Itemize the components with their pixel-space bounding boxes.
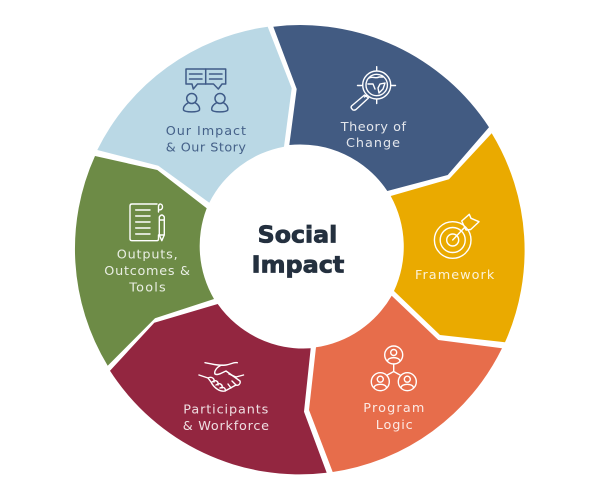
title: Social Impact: Social <box>258 223 337 249</box>
label: Our Impact & Our Story: & Our Story <box>166 141 246 156</box>
label: Theory of Change <box>340 120 406 151</box>
segment shape: dark blue <box>273 25 489 191</box>
label: Program Logic: Program <box>363 401 424 416</box>
label: Our Impact & Our Story <box>166 124 246 156</box>
panel: framework <box>391 133 525 342</box>
label: Outputs, Outcomes & Tools <box>104 247 190 296</box>
title: Social Impact: Impact <box>252 253 344 279</box>
icon: magnifier over globe <box>351 67 396 110</box>
icon: connected people <box>371 346 416 391</box>
label: Outputs, Outcomes & Tools: Outputs, <box>117 247 178 262</box>
label: Participants & Workforce: Participants <box>183 402 269 417</box>
segment shape: maroon <box>110 304 327 474</box>
label: Participants & Workforce <box>183 402 269 434</box>
segment shape: light blue <box>97 27 292 203</box>
icon: handshake <box>199 363 244 391</box>
panel: theory of change <box>273 25 489 191</box>
label: Outputs, Outcomes & Tools: Tools <box>128 281 166 296</box>
label: Program Logic <box>363 401 424 433</box>
panel: program logic <box>309 296 502 472</box>
segment shape: yellow <box>391 133 525 342</box>
icon: speech bubbles and people <box>183 69 228 112</box>
icon: target with arrow <box>434 214 479 258</box>
panel: participants and workforce <box>110 304 327 474</box>
label: Participants & Workforce: & Workforce <box>183 419 269 434</box>
label: Theory of Change: Change <box>346 136 400 151</box>
panel: outputs, outcomes and tools <box>75 156 214 366</box>
panel: our impact and our story <box>97 27 292 203</box>
label: Framework: Framework <box>415 268 495 283</box>
label: Theory of Change: Theory of <box>340 120 406 135</box>
icon: document and pencil <box>130 204 164 241</box>
segment shape: green <box>75 156 214 366</box>
title: Social Impact <box>252 223 344 279</box>
label: Outputs, Outcomes & Tools: Outcomes & <box>104 264 190 279</box>
segment shape: orange <box>309 296 502 472</box>
label: Our Impact & Our Story: Our Impact <box>166 124 246 139</box>
label: Program Logic: Logic <box>376 418 413 433</box>
